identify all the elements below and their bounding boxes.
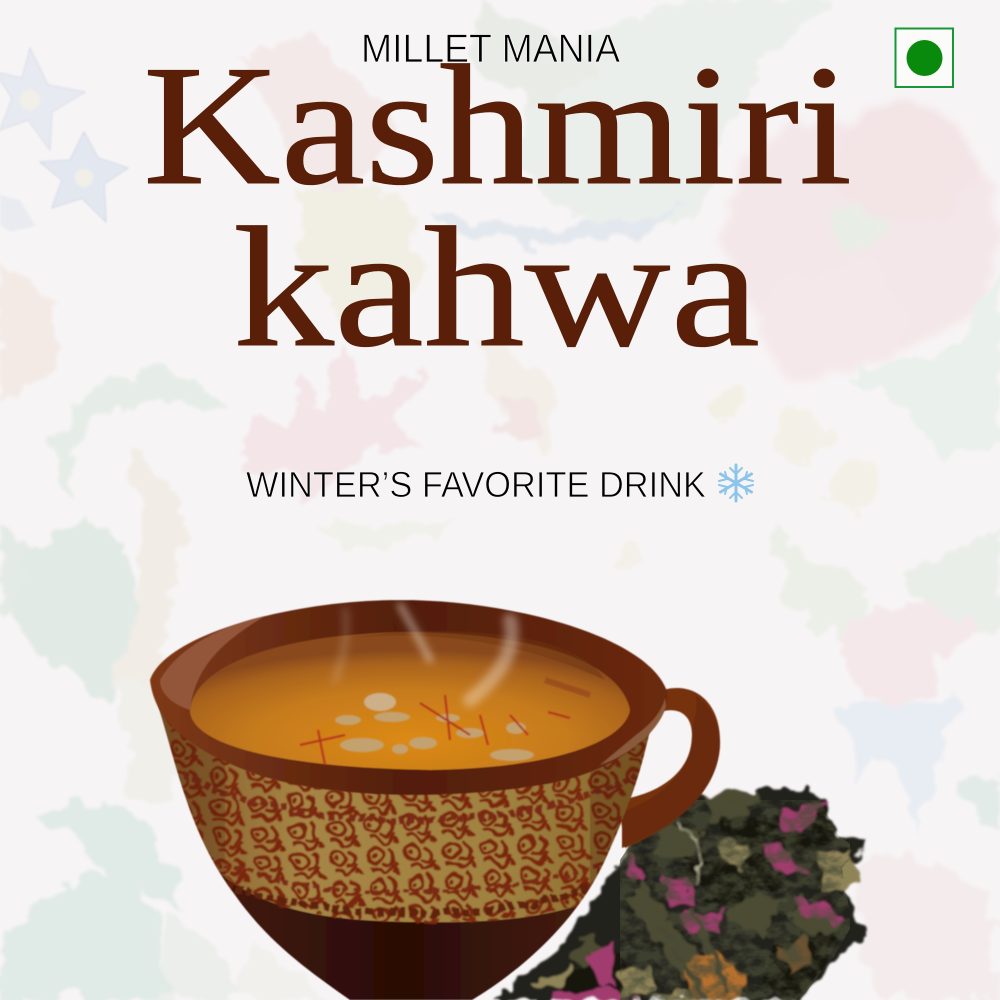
bottom left leaves (0, 804, 330, 1000)
subtitle: WINTER’S FAVORITE DRINK (246, 464, 706, 505)
pink flower centre left (248, 340, 565, 555)
tea leaves pile (490, 790, 870, 1000)
peony top right (722, 100, 998, 370)
leaf texture (620, 800, 850, 1000)
left foliage and leaves (0, 265, 228, 800)
cup body (150, 700, 665, 1000)
steam (335, 605, 512, 700)
brand heading: MILLET MANIA (361, 27, 620, 71)
saffron and almond garnish (300, 680, 590, 765)
cup rim and tea (150, 600, 668, 795)
tea surface (190, 632, 630, 770)
veg mark (896, 28, 953, 87)
cup handle (618, 688, 720, 848)
title: Kashmiri: Kashmiri (143, 31, 852, 221)
right foliage (618, 260, 1000, 1000)
title: kahwa: kahwa (233, 193, 760, 383)
blue flowers top left (0, 48, 128, 232)
icon: snowflake (719, 465, 753, 501)
central foliage top (240, 0, 830, 320)
patterned band (150, 710, 660, 922)
